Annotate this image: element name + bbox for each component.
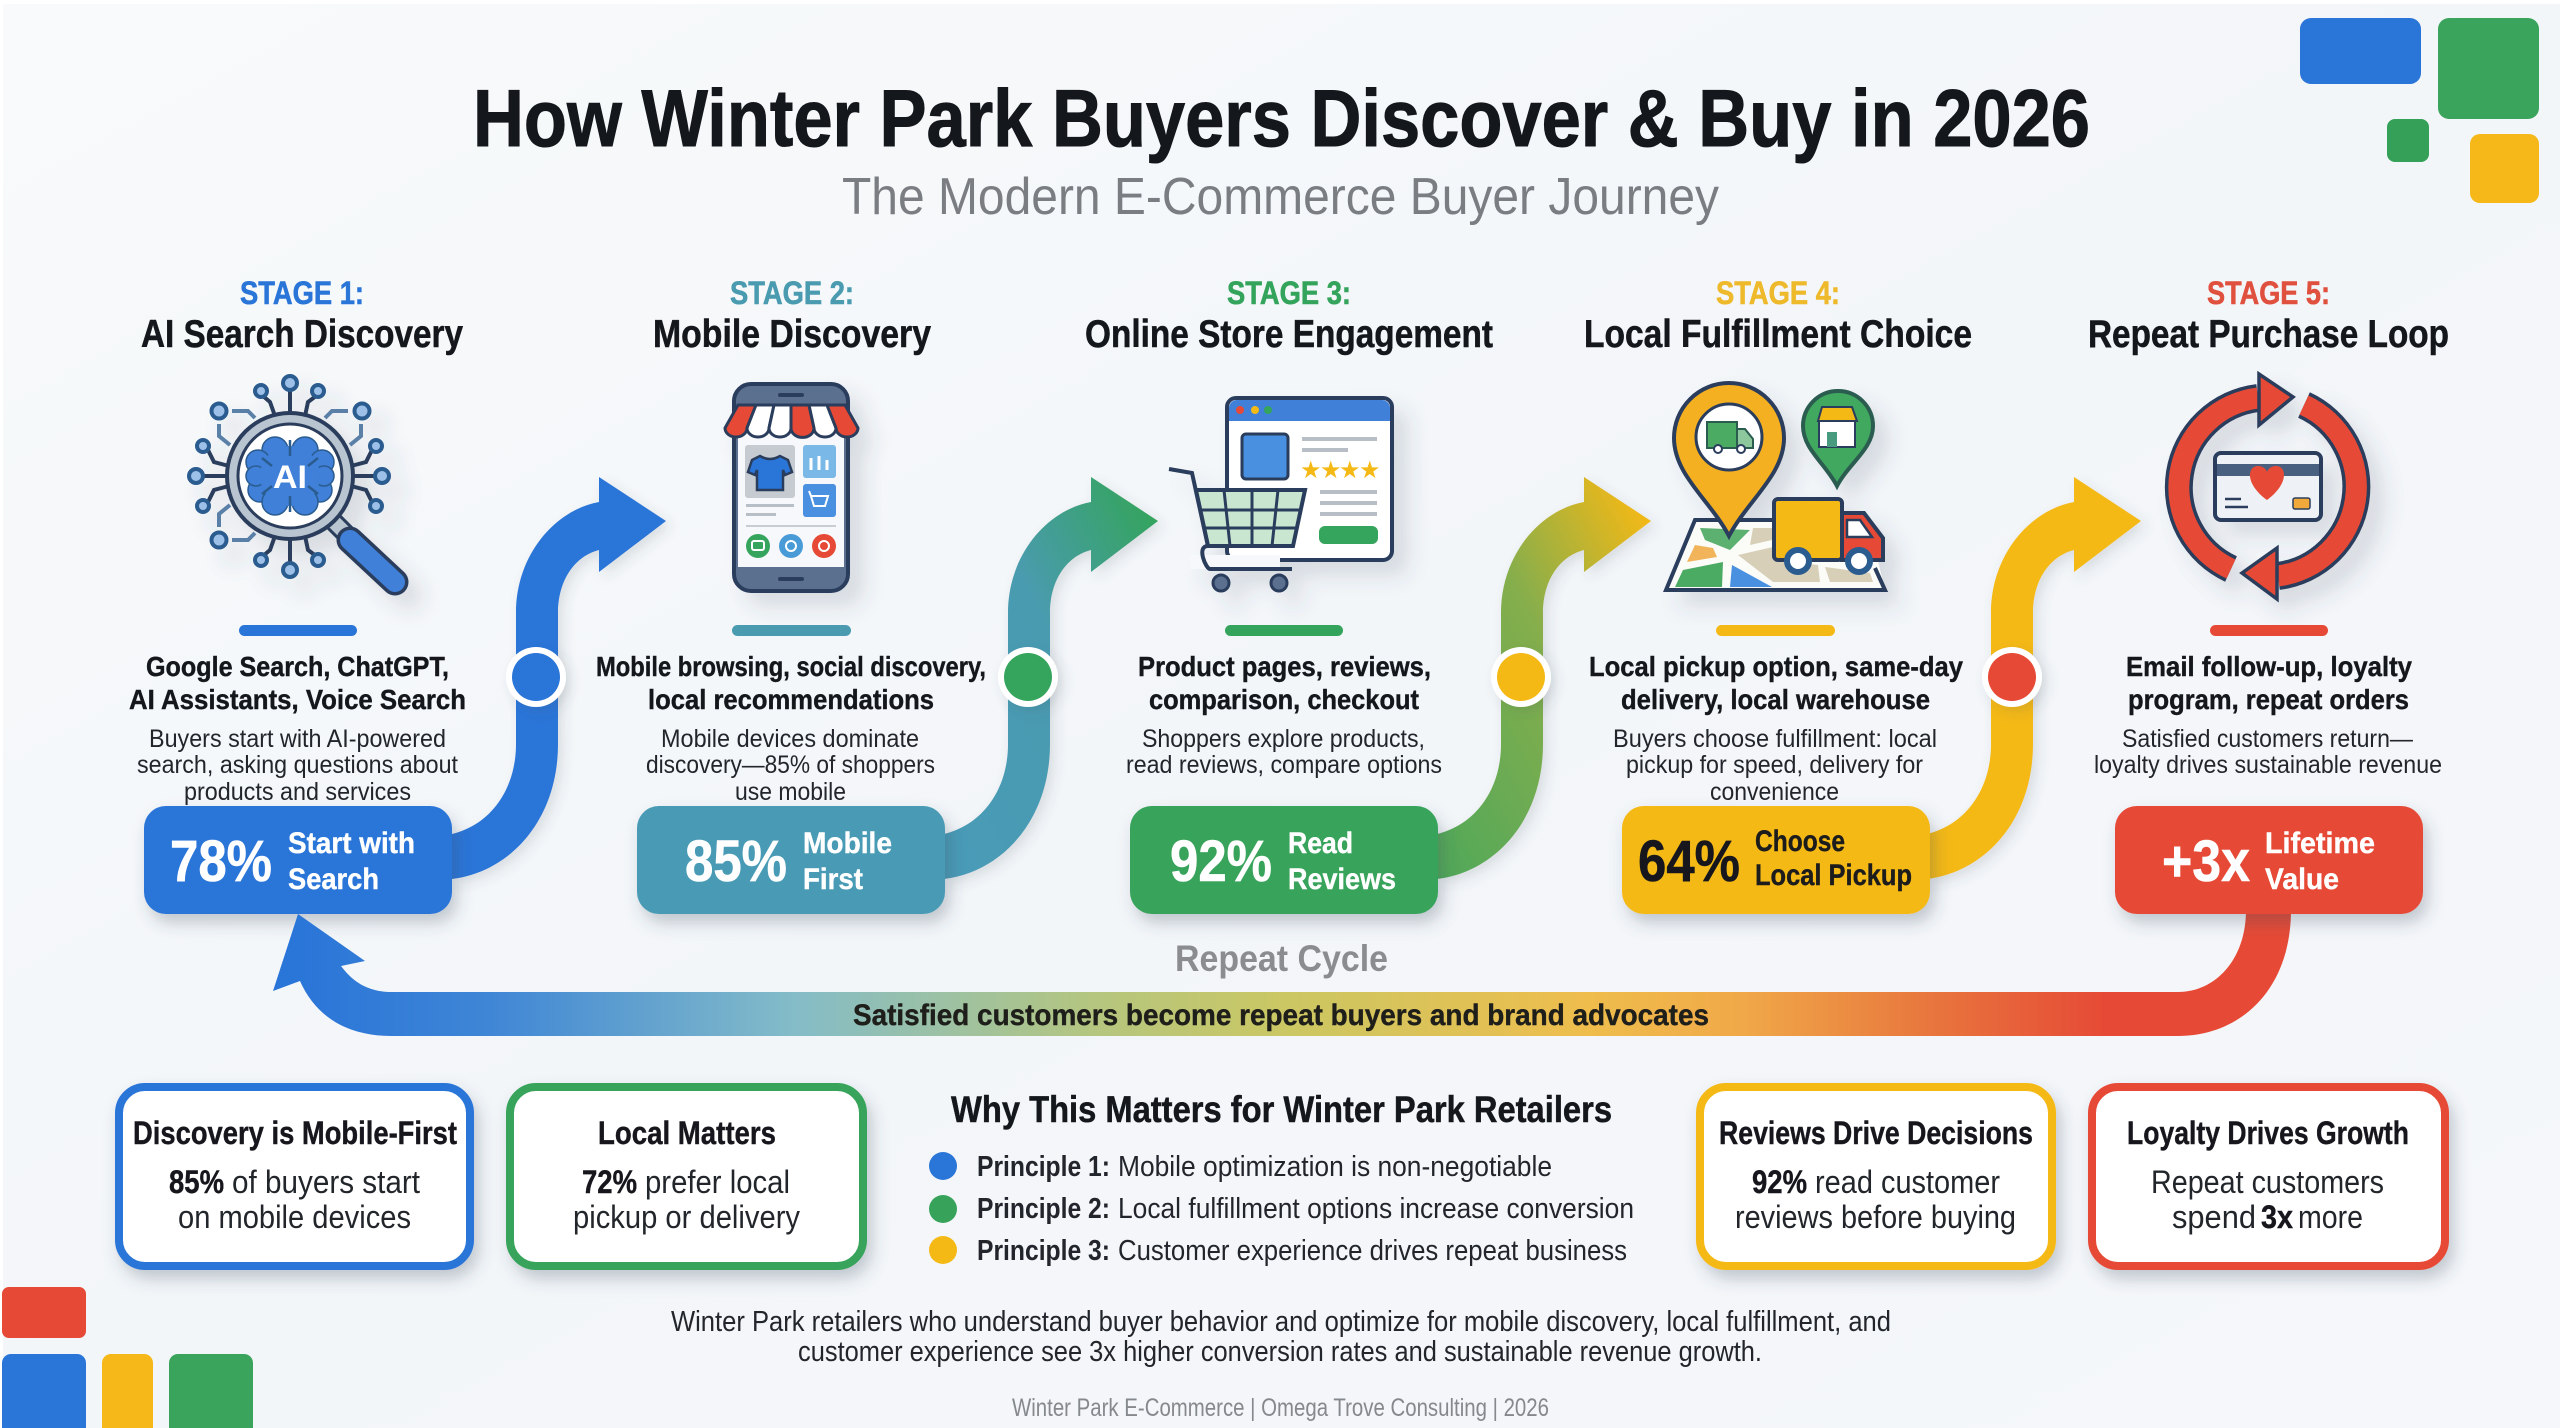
stage 2 tools: Mobile browsing, social discovery, [596,651,986,682]
stage 3 stat box: Read [1288,827,1353,860]
stage 1 tools: AI Assistants, Voice Search [129,684,466,715]
card: discovery is mobile-first [119,1087,470,1266]
card: discovery is mobile-first: on mobile devices [178,1199,411,1235]
stage 1 description: products and services [184,778,411,806]
stage 1 bar [239,625,357,636]
stage 2 tools [596,651,986,715]
stage 1 stat box: Search [288,863,379,896]
stage 2 description: use mobile [735,778,846,806]
panel: stage 5 [2088,275,2449,779]
arrow: stage 3 to stage 4 [1437,477,1651,879]
card: local matters: 72% [582,1164,637,1200]
decoration: bottom-left colour blocks [2,1287,253,1428]
stage 2 bar [732,625,851,636]
stage 4 tools: delivery, local warehouse [1621,684,1930,715]
card: loyalty drives growth: spend [2172,1199,2256,1235]
card: local matters: Local Matters [598,1115,776,1151]
principle 1 [929,1151,1552,1183]
icon: browser and cart: ★ [1320,457,1342,484]
stage 4 bar [1716,625,1835,636]
arrow: stage 2 to stage 3 [944,477,1158,879]
stage 5 description: loyalty drives sustainable revenue [2094,751,2442,779]
principle 3: Customer experience drives repeat business [1118,1235,1627,1267]
stage 2 stat box: 85% [685,829,787,894]
arrow: repeat cycle loop [273,910,2291,1036]
stage 5 stat box: Value [2265,863,2339,896]
stage 4 description [1613,725,1937,806]
icon: browser and cart: ★ [1300,457,1322,484]
card: discovery is mobile-first: of buyers start [232,1164,420,1200]
principle 2: Principle 2: [977,1193,1110,1225]
stage 3 tools [1138,651,1431,715]
stage 2 description: discovery—85% of shoppers [646,751,935,779]
stage 1 tools [129,651,466,715]
stage 1 tools: Google Search, ChatGPT, [146,651,449,682]
stage 1 label: STAGE 1: [240,275,364,311]
stage 5 tools: program, repeat orders [2128,684,2409,715]
stage 3 bar [1225,625,1343,636]
icon: map pins and truck [1666,383,1885,590]
stage 5 stat box: +3x [2162,829,2250,894]
stage 4 heading: Local Fulfillment Choice [1584,313,1972,356]
card: loyalty drives growth [2092,1087,2445,1266]
stage 1 description [137,725,458,806]
stage 3 stat box: Reviews [1288,863,1396,896]
stage 3 tools: comparison, checkout [1149,684,1419,715]
summary text: customer experience see 3x higher conversion rates and sustainable revenue growth. [798,1336,1762,1368]
principle 2 [929,1193,1634,1225]
stage 3 stat box [1130,806,1438,914]
stage 5 description: Satisfied customers return— [2122,725,2413,753]
stage 4 description: Buyers choose fulfillment: local [1613,725,1937,753]
stage 4 stat box: Local Pickup [1755,859,1912,892]
repeat cycle caption: Satisfied customers become repeat buyers and brand advocates [853,999,1709,1032]
stage 5 tools: Email follow-up, loyalty [2126,651,2412,682]
icon: browser and cart: ★ [1359,457,1381,484]
stage 4 description: pickup for speed, delivery for [1626,751,1923,779]
footer credit: Winter Park E-Commerce | Omega Trove Consulting | 2026 [1012,1394,1549,1422]
panel: stage 4 [1584,275,1972,914]
stage 5 bar [2210,625,2328,636]
decoration: top-right colour blocks [2300,18,2539,203]
principle 2: Local fulfillment options increase conversion [1118,1193,1634,1225]
card: reviews drive decisions: read customer [1815,1164,2000,1200]
stage 5 heading: Repeat Purchase Loop [2088,313,2449,356]
list: principles [929,1151,1634,1267]
card: reviews drive decisions: reviews before buying [1735,1199,2016,1235]
principle 1: Mobile optimization is non-negotiable [1118,1151,1552,1183]
stage 1 stat box: Start with [288,827,415,860]
icon: browser and cart [1169,398,1392,591]
subtitle: The Modern E-Commerce Buyer Journey [842,168,1719,226]
stage 1 stat box: 78% [170,829,272,894]
principle 3: Principle 3: [977,1235,1110,1267]
icon: AI magnifier: AI [273,459,307,495]
stage 5 tools [2126,651,2412,715]
stage 2 tools: local recommendations [648,684,934,715]
stage 2 description: Mobile devices dominate [661,725,919,753]
card: discovery is mobile-first: 85% [169,1164,224,1200]
arrow: stage 1 to stage 2 [452,477,666,879]
icon: browser and cart: ★ [1339,457,1361,484]
icon: AI magnifier [189,376,395,582]
stage 1 description: search, asking questions about [137,751,458,779]
panel: stage 3 [1085,275,1493,914]
card: local matters: prefer local [645,1164,790,1200]
stage 5 stat box: Lifetime [2265,827,2375,860]
panel: stage 1 [129,275,466,914]
stage 3 tools: Product pages, reviews, [1138,651,1431,682]
card: loyalty drives growth: Loyalty Drives Growth [2127,1115,2409,1151]
stage 4 tools [1589,651,1963,715]
principle 1: Principle 1: [977,1151,1110,1183]
arrow node: red [1982,647,2042,707]
stage 2 stat box: First [803,863,863,896]
stage 2 heading: Mobile Discovery [653,313,931,356]
icon: mobile storefront [725,384,858,591]
stage 2 description [646,725,935,806]
card: reviews drive decisions [1700,1087,2052,1266]
stage 2 stat box: Mobile [803,827,892,860]
arrow: stage 4 to stage 5 [1927,477,2141,879]
heading: why this matters: Why This Matters for Winter Park Retailers [951,1089,1612,1130]
card: loyalty drives growth: Repeat customers [2151,1164,2384,1200]
stage 4 tools: Local pickup option, same-day [1589,651,1963,682]
stage 3 description: read reviews, compare options [1126,751,1442,779]
stage 5 label: STAGE 5: [2207,275,2330,311]
stage 4 stat box: 64% [1638,829,1740,894]
stage 1 heading: AI Search Discovery [141,313,463,356]
stage 2 label: STAGE 2: [730,275,854,311]
repeat cycle label: Repeat Cycle [1175,938,1388,979]
stage 4 stat box: Choose [1755,825,1845,858]
card: reviews drive decisions: Reviews Drive Decisions [1719,1115,2033,1151]
stage 1 description: Buyers start with AI-powered [149,725,446,753]
card: reviews drive decisions: 92% [1752,1164,1807,1200]
panel: stage 2 [596,275,986,914]
stage 2 stat box [637,806,945,914]
card: loyalty drives growth: 3x [2261,1199,2293,1235]
stage 5 stat box [2115,806,2423,914]
card: local matters [510,1087,863,1266]
stage 4 description: convenience [1710,778,1839,806]
stage 4 label: STAGE 4: [1716,275,1840,311]
card: loyalty drives growth: more [2298,1199,2363,1235]
icon: repeat loop with loyalty card [2179,374,2356,599]
arrow node: green [998,647,1058,707]
title: How Winter Park Buyers Discover & Buy in 2026 [473,74,2090,164]
card: discovery is mobile-first: Discovery is Mobile-First [133,1115,457,1151]
stage 3 description: Shoppers explore products, [1142,725,1425,753]
card: local matters: pickup or delivery [573,1199,800,1235]
stage 3 description [1126,725,1442,779]
stage 5 description [2094,725,2442,779]
stage 3 stat box: 92% [1170,829,1272,894]
arrow node: yellow [1491,647,1551,707]
summary text: Winter Park retailers who understand buyer behavior and optimize for mobile discovery, local fulfillment, and [671,1306,1891,1338]
stage 4 stat box [1622,806,1930,914]
principle 3 [929,1235,1627,1267]
stage 1 stat box [144,806,452,914]
stage 3 heading: Online Store Engagement [1085,313,1493,356]
arrow node: blue [506,647,566,707]
summary text [671,1306,1891,1368]
stage 3 label: STAGE 3: [1227,275,1351,311]
